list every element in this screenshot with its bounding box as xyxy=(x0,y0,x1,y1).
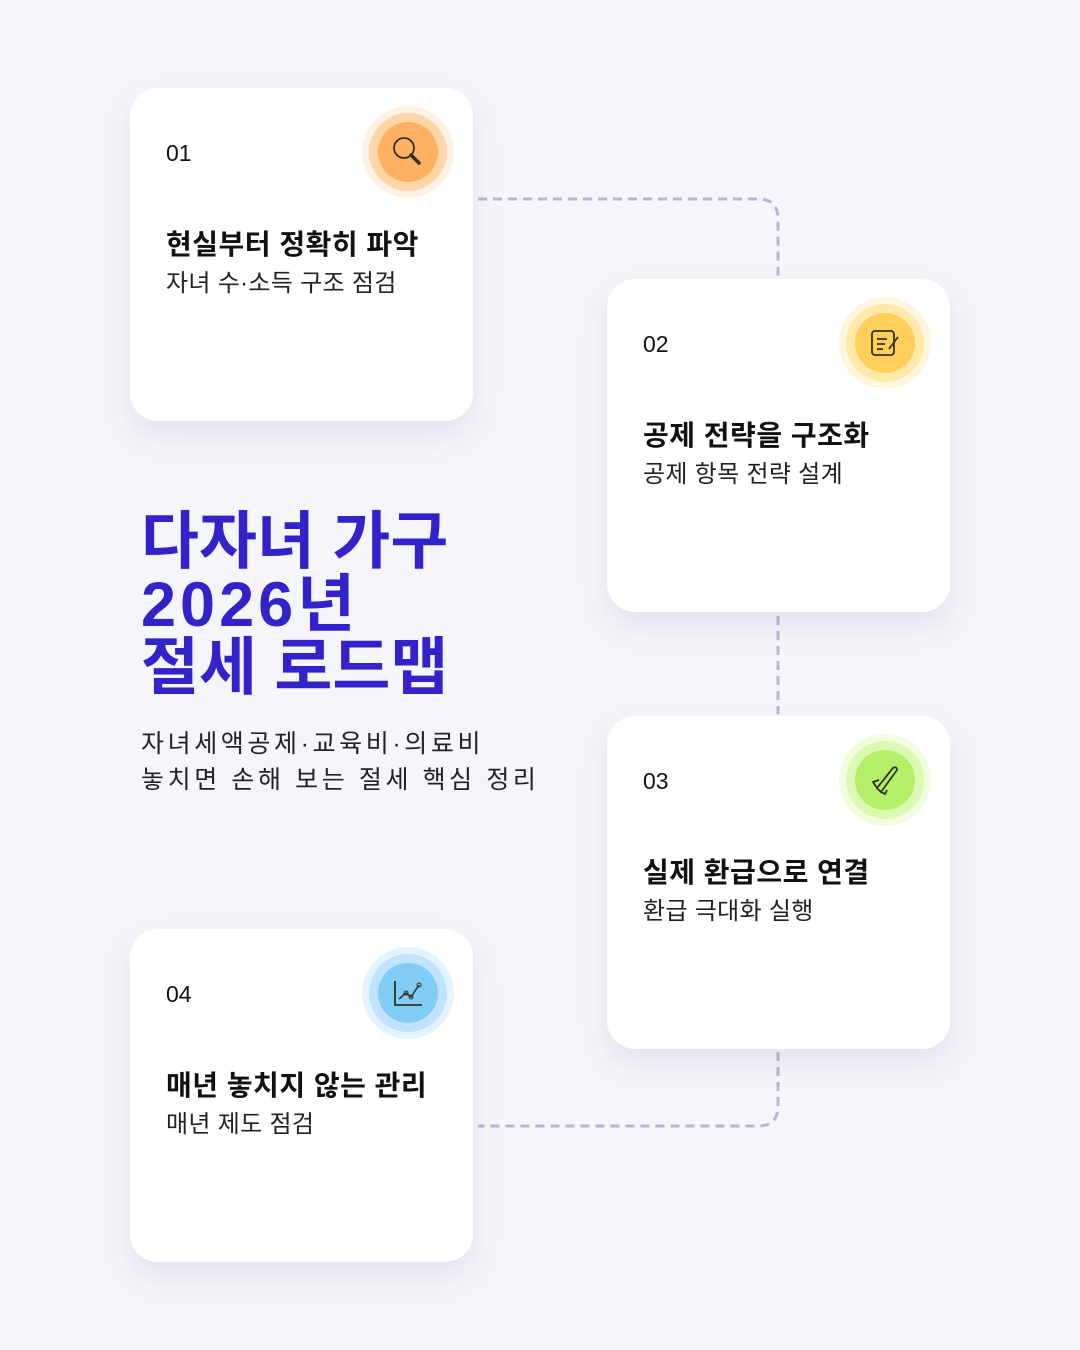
subtitle: 자녀세액공제·교육비·의료비 xyxy=(141,730,484,758)
title: 다자녀 가구 xyxy=(141,507,448,577)
card 04: 04 xyxy=(166,981,192,1007)
card 01: 현실부터 정확히 파악 xyxy=(166,229,419,260)
card 01: 자녀 수·소득 구조 점검 xyxy=(166,270,397,297)
subtitle: 놓치면 손해 보는 절세 핵심 정리 xyxy=(141,766,540,794)
icon: chart xyxy=(362,947,454,1039)
card 02: 02 xyxy=(643,331,669,357)
icon: notepad xyxy=(839,297,931,389)
card 03: 환급 극대화 실행 xyxy=(643,898,814,925)
card 02: 공제 항목 전략 설계 xyxy=(643,461,843,488)
card 04: 매년 놓치지 않는 관리 xyxy=(166,1070,427,1101)
card 03 xyxy=(607,716,950,1049)
card 03: 실제 환급으로 연결 xyxy=(643,857,870,888)
subtitle xyxy=(141,730,540,794)
card 04: 매년 제도 점검 xyxy=(166,1111,314,1138)
card 01: 01 xyxy=(166,140,192,166)
title: 절세 로드맵 xyxy=(141,633,448,703)
icon: rocket xyxy=(839,734,931,826)
title: 2026년 xyxy=(141,570,355,640)
card 02: 공제 전략을 구조화 xyxy=(643,420,870,451)
card 01 xyxy=(130,88,473,421)
card 02 xyxy=(607,279,950,612)
icon: magnifier xyxy=(362,106,454,198)
card 04 xyxy=(130,929,473,1262)
card 03: 03 xyxy=(643,768,669,794)
title xyxy=(141,507,448,703)
